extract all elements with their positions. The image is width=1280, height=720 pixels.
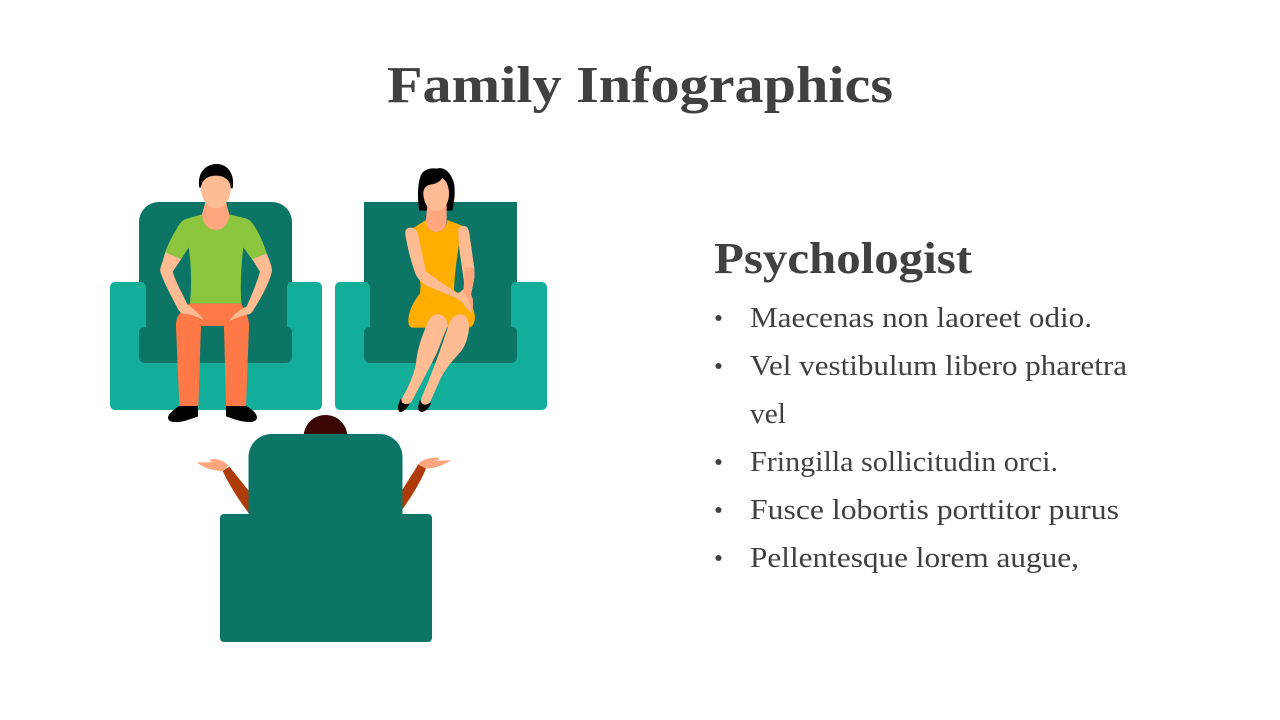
- bullet item 2: [716, 351, 1128, 430]
- left shoe: [398, 398, 410, 412]
- right shoe: [418, 399, 432, 412]
- face: [423, 178, 449, 211]
- bullet item 1: Maecenas non laoreet odio.: [750, 303, 1092, 334]
- bullet list: [716, 303, 1128, 574]
- title: Family Infographics: [387, 57, 893, 114]
- bullet item 5: Pellentesque lorem augue,: [750, 543, 1079, 574]
- right leg: [421, 314, 469, 405]
- right shoe: [226, 406, 257, 422]
- left leg: [402, 314, 447, 404]
- left arm: [160, 252, 204, 320]
- left shoe: [168, 406, 198, 422]
- neck: [426, 205, 447, 232]
- hair: [199, 164, 233, 188]
- neck: [202, 200, 229, 230]
- illustration: psychologist seen from behind: [197, 415, 451, 642]
- armchair base and arms: [110, 282, 322, 410]
- illustration: man on armchair: [110, 164, 322, 422]
- head: [304, 415, 348, 459]
- far forearm shade: [463, 268, 474, 314]
- t-shirt: [165, 214, 267, 303]
- dress: [408, 220, 475, 328]
- left hand: [197, 459, 228, 471]
- armchair back: [139, 202, 292, 345]
- face: [201, 176, 231, 208]
- armchair cushion: [139, 327, 292, 363]
- bullet item 4: Fusce lobortis porttitor purus: [750, 495, 1119, 526]
- left arm: [223, 467, 250, 515]
- man figure: [160, 164, 272, 422]
- armchair base and arms: [335, 282, 547, 410]
- arms and hands: [197, 457, 451, 515]
- right arm: [401, 464, 426, 512]
- heading: Psychologist: Psychologist: [714, 234, 972, 283]
- bullet item 2: vel: [750, 399, 786, 430]
- woman figure: [398, 168, 475, 412]
- right arm: [229, 253, 272, 321]
- far arm: [456, 226, 474, 314]
- armchair cushion: [364, 327, 517, 363]
- hair back: [418, 168, 455, 211]
- trousers: [176, 303, 249, 406]
- bullet item 2: Vel vestibulum libero pharetra: [750, 351, 1128, 382]
- near arm: [405, 228, 472, 313]
- armchair back: [364, 202, 517, 345]
- armchair: [220, 434, 432, 642]
- bullet item 3: Fringilla sollicitudin orci.: [750, 447, 1058, 478]
- right hand: [418, 457, 451, 469]
- illustration: woman on armchair: [335, 168, 547, 412]
